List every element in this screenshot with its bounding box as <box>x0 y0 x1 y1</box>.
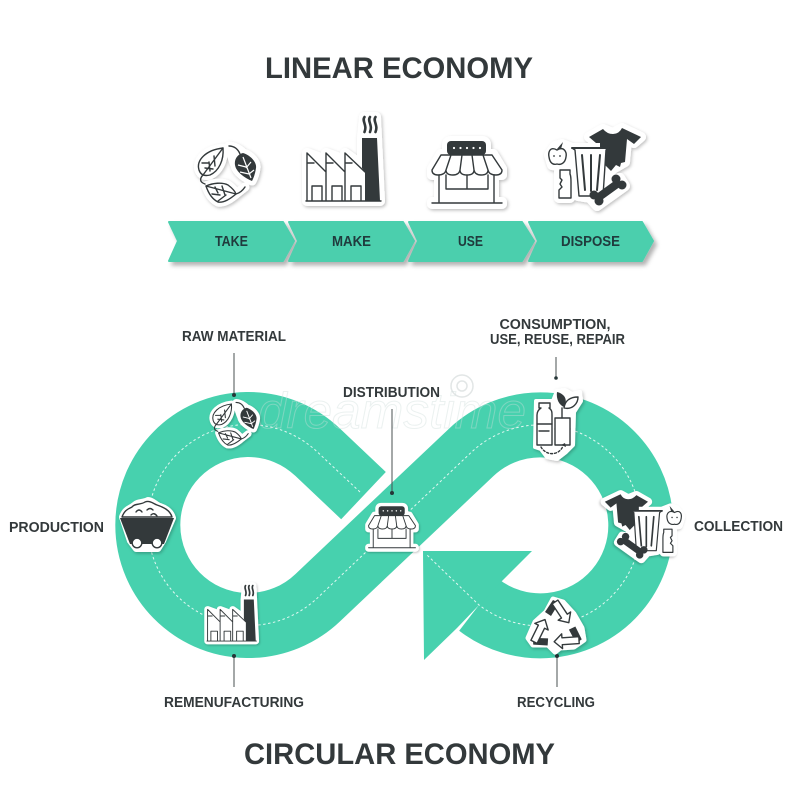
label: recycling: RECYCLING <box>517 695 595 711</box>
icon: trash on loop <box>605 494 681 559</box>
infinity loop band with arrow <box>148 425 641 660</box>
label: raw material: RAW MATERIAL <box>182 329 286 345</box>
label: consumption, use, reuse, repair: CONSUMPTION, <box>500 317 610 333</box>
label: consumption, use, reuse, repair: USE, REUSE, REPAIR <box>490 332 625 348</box>
title: linear economy: LINEAR ECONOMY <box>265 52 533 85</box>
arrow: use <box>409 222 534 261</box>
title: circular economy: CIRCULAR ECONOMY <box>244 738 555 771</box>
arrow: use: USE <box>458 234 483 250</box>
watermark: dreamstime <box>258 383 526 439</box>
arrow: take: TAKE <box>215 234 248 250</box>
icon: trash (dispose) <box>549 128 641 206</box>
icon: leaves (take) <box>198 146 256 202</box>
icon: mine cart <box>120 500 174 549</box>
arrow: dispose: DISPOSE <box>561 234 620 250</box>
icon: factory (make) <box>306 117 381 201</box>
label: production: PRODUCTION <box>9 520 104 536</box>
label: remanufacturing <box>164 654 304 711</box>
arrow: make <box>289 222 414 261</box>
label: remanufacturing: REMENUFACTURING <box>164 695 304 711</box>
label: raw material <box>182 329 286 397</box>
label: distribution <box>343 385 440 495</box>
label: recycling <box>517 654 595 711</box>
label: collection: COLLECTION <box>694 519 783 535</box>
arrow: take <box>169 222 294 261</box>
label: consumption, use, reuse, repair <box>490 317 625 380</box>
icon: factory on loop <box>207 586 256 641</box>
icon: leaves on loop <box>213 402 257 445</box>
arrow: make: MAKE <box>332 234 371 250</box>
arrow: dispose <box>529 222 653 261</box>
label: distribution: DISTRIBUTION <box>343 385 440 401</box>
icon: shop on loop <box>369 506 415 548</box>
icon: bottles and plant <box>535 390 581 459</box>
icon: shop (use) <box>432 141 502 204</box>
icon: recycling arrows <box>524 599 586 655</box>
